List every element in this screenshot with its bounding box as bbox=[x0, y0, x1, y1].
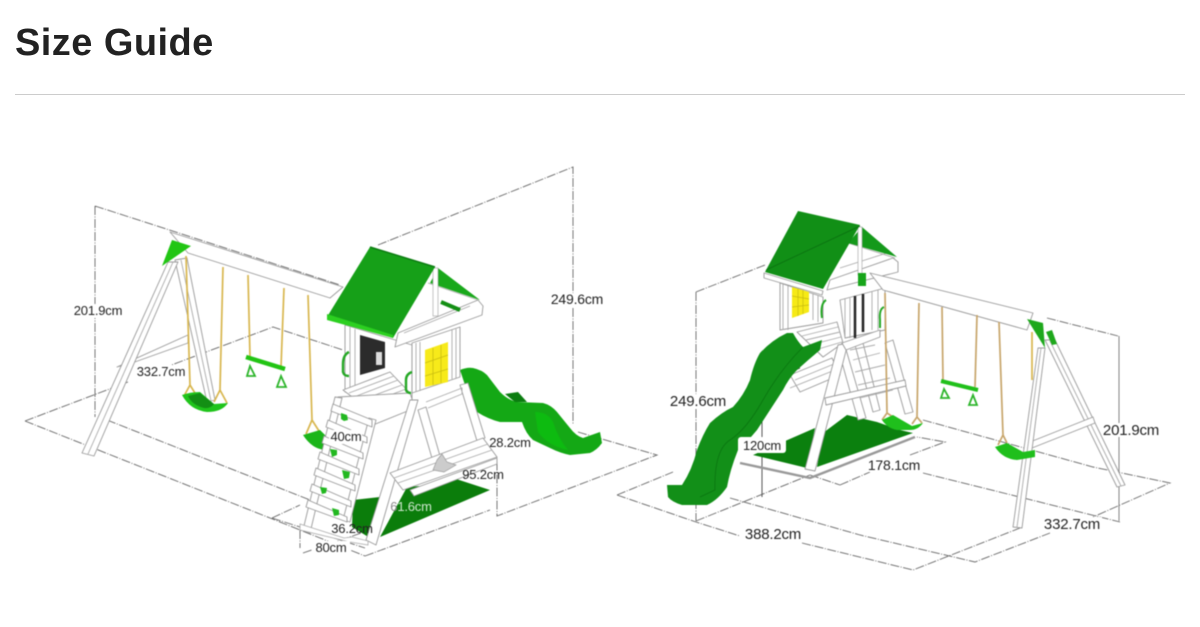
dimension lines right bbox=[617, 265, 1170, 570]
label 201.9cm left: 201.9cm bbox=[74, 303, 122, 318]
label 249.6cm right: 249.6cm bbox=[670, 393, 726, 410]
deck right bbox=[797, 322, 843, 357]
tower right bbox=[667, 211, 913, 505]
label 95.2cm: 95.2cm bbox=[462, 467, 504, 482]
door bars right bbox=[855, 294, 863, 338]
label 61.6cm: 61.6cm bbox=[390, 499, 432, 514]
swing two right bbox=[995, 322, 1035, 460]
ladder right bbox=[838, 343, 893, 420]
slide left bbox=[460, 368, 602, 455]
handles left bbox=[343, 352, 412, 393]
label 28.2cm: 28.2cm bbox=[489, 435, 531, 450]
door left bbox=[360, 335, 385, 375]
label 388.2cm: 388.2cm bbox=[745, 526, 801, 543]
base rail right bbox=[740, 437, 915, 478]
window right bbox=[792, 287, 809, 318]
bracket left bbox=[162, 240, 191, 266]
label 40cm: 40cm bbox=[330, 429, 362, 444]
trapeze left bbox=[246, 275, 286, 387]
back roof left bbox=[430, 268, 480, 300]
title: Size Guide bbox=[15, 22, 214, 64]
window left bbox=[425, 342, 448, 387]
trapeze right bbox=[941, 307, 978, 405]
swing frame left bbox=[82, 232, 343, 456]
label 201.9cm right: 201.9cm bbox=[1103, 422, 1159, 439]
right playset bbox=[617, 211, 1170, 570]
roof right bbox=[765, 211, 860, 289]
label 120cm: 120cm bbox=[743, 438, 781, 453]
label 249.6cm left: 249.6cm bbox=[551, 291, 603, 307]
deck left bbox=[343, 372, 410, 412]
handle right bbox=[822, 300, 884, 328]
label 36.2cm: 36.2cm bbox=[331, 521, 373, 536]
bracket right bbox=[1027, 319, 1045, 348]
ladder holds left bbox=[320, 413, 350, 516]
roof left bbox=[327, 247, 435, 338]
dimension labels bbox=[74, 291, 1160, 555]
label 80cm: 80cm bbox=[316, 540, 346, 555]
frame left bbox=[366, 383, 497, 545]
label 178.1cm: 178.1cm bbox=[868, 457, 920, 473]
swing frame right bbox=[870, 273, 1125, 528]
swing one right bbox=[882, 293, 923, 430]
label 332.7cm left: 332.7cm bbox=[137, 364, 185, 379]
label 332.7cm right: 332.7cm bbox=[1044, 516, 1100, 533]
left playset bbox=[25, 167, 657, 556]
dimension lines left bbox=[25, 167, 657, 556]
back roof right bbox=[848, 227, 897, 257]
slide right bbox=[667, 333, 822, 505]
swing one left bbox=[182, 256, 228, 412]
ladder left bbox=[303, 397, 376, 533]
mat right bbox=[753, 415, 913, 468]
swing two left bbox=[303, 295, 327, 450]
frame right bbox=[805, 330, 913, 471]
mat left bbox=[352, 477, 490, 538]
tower left bbox=[300, 247, 497, 545]
